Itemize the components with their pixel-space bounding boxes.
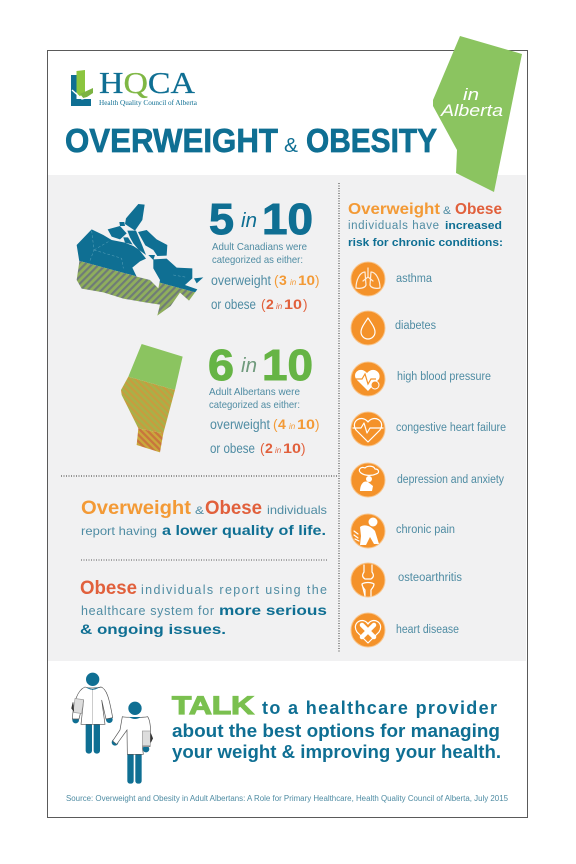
condition: high blood pressure [351,362,491,396]
icon: drop [361,318,375,339]
condition: chronic pain [351,514,455,548]
stat: 6 in 10: 10 [262,341,313,390]
text: lower quality of life: & [195,505,205,517]
Canada obese: ) [303,297,308,312]
infographic [47,36,528,818]
Canada obese: ( [261,297,266,312]
Alberta obese: or obese [210,441,255,456]
Alberta obese: 10 [283,440,301,456]
heading: chronic conditions: increased [445,220,502,232]
stat: 5 in 10: in [241,210,257,232]
text: lower quality of life: Obese [205,498,262,519]
banner text [440,85,503,120]
heading: chronic conditions: Overweight [348,201,440,218]
condition: chronic pain: chronic pain [396,524,455,536]
text: Canadians categorized: categorized as either: [212,254,303,266]
text: Canadians categorized: Adult Canadians were [212,241,307,253]
text: healthcare system use: healthcare system for [81,604,214,618]
condition: asthma [351,262,433,296]
condition: heart disease: heart disease [396,624,459,636]
condition: heart disease [351,613,459,647]
HQCA logo: HQCA [99,65,196,100]
text: healthcare system use: & ongoing issues. [80,621,226,637]
Alberta overweight: ) [315,417,320,432]
icon: bent person [354,518,379,545]
source: Source: Overweight and Obesity in Adult Albertans: A Role for Primary Healthcare, Health Quality Council of Alberta, July 2015 [66,794,509,803]
text: Canadians categorized [212,241,307,266]
stat: 5 in 10: 10 [262,195,313,244]
provider two [112,702,153,784]
Alberta obese: ( [260,441,265,456]
Canada overweight [211,272,320,288]
title: & [284,135,299,157]
gray content panel [48,175,526,661]
title: OVERWEIGHT [65,122,278,159]
text: Albertans categorized: categorized as either: [209,399,300,411]
Alberta overweight: 4 [278,416,286,432]
condition: diabetes [351,311,436,345]
condition: congestive heart failure: congestive heart failure [396,422,506,434]
Canada overweight: 10 [298,272,315,288]
Alberta obese [210,440,306,456]
Alberta map banner [433,36,522,192]
stat: 6 in 10: in [241,355,257,377]
Alberta obese: ) [301,441,306,456]
provider one [72,673,113,754]
banner text: Alberta [440,101,503,120]
icon: person under cloud [359,466,379,491]
condition: depression and anxiety [351,463,504,497]
text: healthcare system use [80,578,327,637]
condition: congestive heart failure [351,412,506,446]
stat: 6 in 10 [208,341,313,390]
text: Albertans categorized [209,386,300,411]
text: lower quality of life: individuals [267,503,327,517]
banner text: in [463,85,479,104]
text: lower quality of life [81,498,327,538]
map: Alberta [121,344,183,452]
map: Canada [77,204,203,316]
text: Albertans categorized: Adult Albertans were [209,386,300,398]
call to action: to a healthcare provider [262,698,497,718]
page frame [48,50,528,818]
Alberta overweight [210,416,320,432]
Canada obese: or obese [211,297,256,312]
heading: chronic conditions [348,201,503,249]
text: healthcare system use: individuals report using the [141,583,327,597]
call to action [172,692,501,762]
condition: depression and anxiety: depression and anxiety [397,474,504,486]
text: lower quality of life: report having [81,524,157,538]
Canada obese: in [276,302,283,311]
Canada overweight: in [290,278,297,287]
title: OBESITY [306,122,437,159]
text: healthcare system use: more serious [219,602,327,618]
heading: chronic conditions: & [443,205,452,217]
icon: knee joint [362,565,374,596]
Canada obese [211,296,308,312]
Canada obese: 2 [266,296,274,312]
Alberta overweight: ( [273,417,278,432]
icon: lungs [356,268,380,288]
heading: chronic conditions: risk for chronic conditions: [348,237,503,249]
condition: osteoarthritis [351,563,462,597]
Alberta overweight: in [289,422,296,431]
condition: diabetes: diabetes [395,320,436,332]
call to action: TALK [172,692,254,720]
Alberta overweight: overweight [210,417,270,432]
stat: 5 in 10 [209,195,313,244]
Canada overweight: ( [274,273,279,288]
call to action: your weight & improving your health. [172,742,501,762]
heading: chronic conditions: individuals have [348,220,439,232]
text: lower quality of life: Overweight [81,498,192,519]
Alberta obese: in [275,446,282,455]
text: healthcare system use: Obese [80,578,137,599]
condition: asthma: asthma [396,273,433,285]
heading: chronic conditions: Obese [455,201,502,218]
stat: 5 in 10: 5 [209,195,234,244]
call to action: about the best options for managing [172,721,500,741]
icon: healthcare providers [72,673,153,784]
stat: 6 in 10: 6 [208,341,234,390]
Canada overweight: 3 [279,272,287,288]
icon: bandaged heart [355,620,381,643]
condition: osteoarthritis: osteoarthritis [398,572,462,584]
Alberta obese: 2 [265,440,273,456]
title [65,122,437,159]
Canada obese: 10 [284,296,302,312]
HQCA logo: Health Quality Council of Alberta [99,98,198,107]
condition: high blood pressure: high blood pressure [397,371,491,383]
icon: heart outline [353,418,383,442]
HQCA logo [71,65,198,107]
Alberta overweight: 10 [297,416,315,432]
Canada overweight: overweight [211,273,271,288]
icon: heart with cuff [353,370,380,391]
Canada overweight: ) [315,273,320,288]
text: lower quality of life: a lower quality of life. [162,522,326,538]
